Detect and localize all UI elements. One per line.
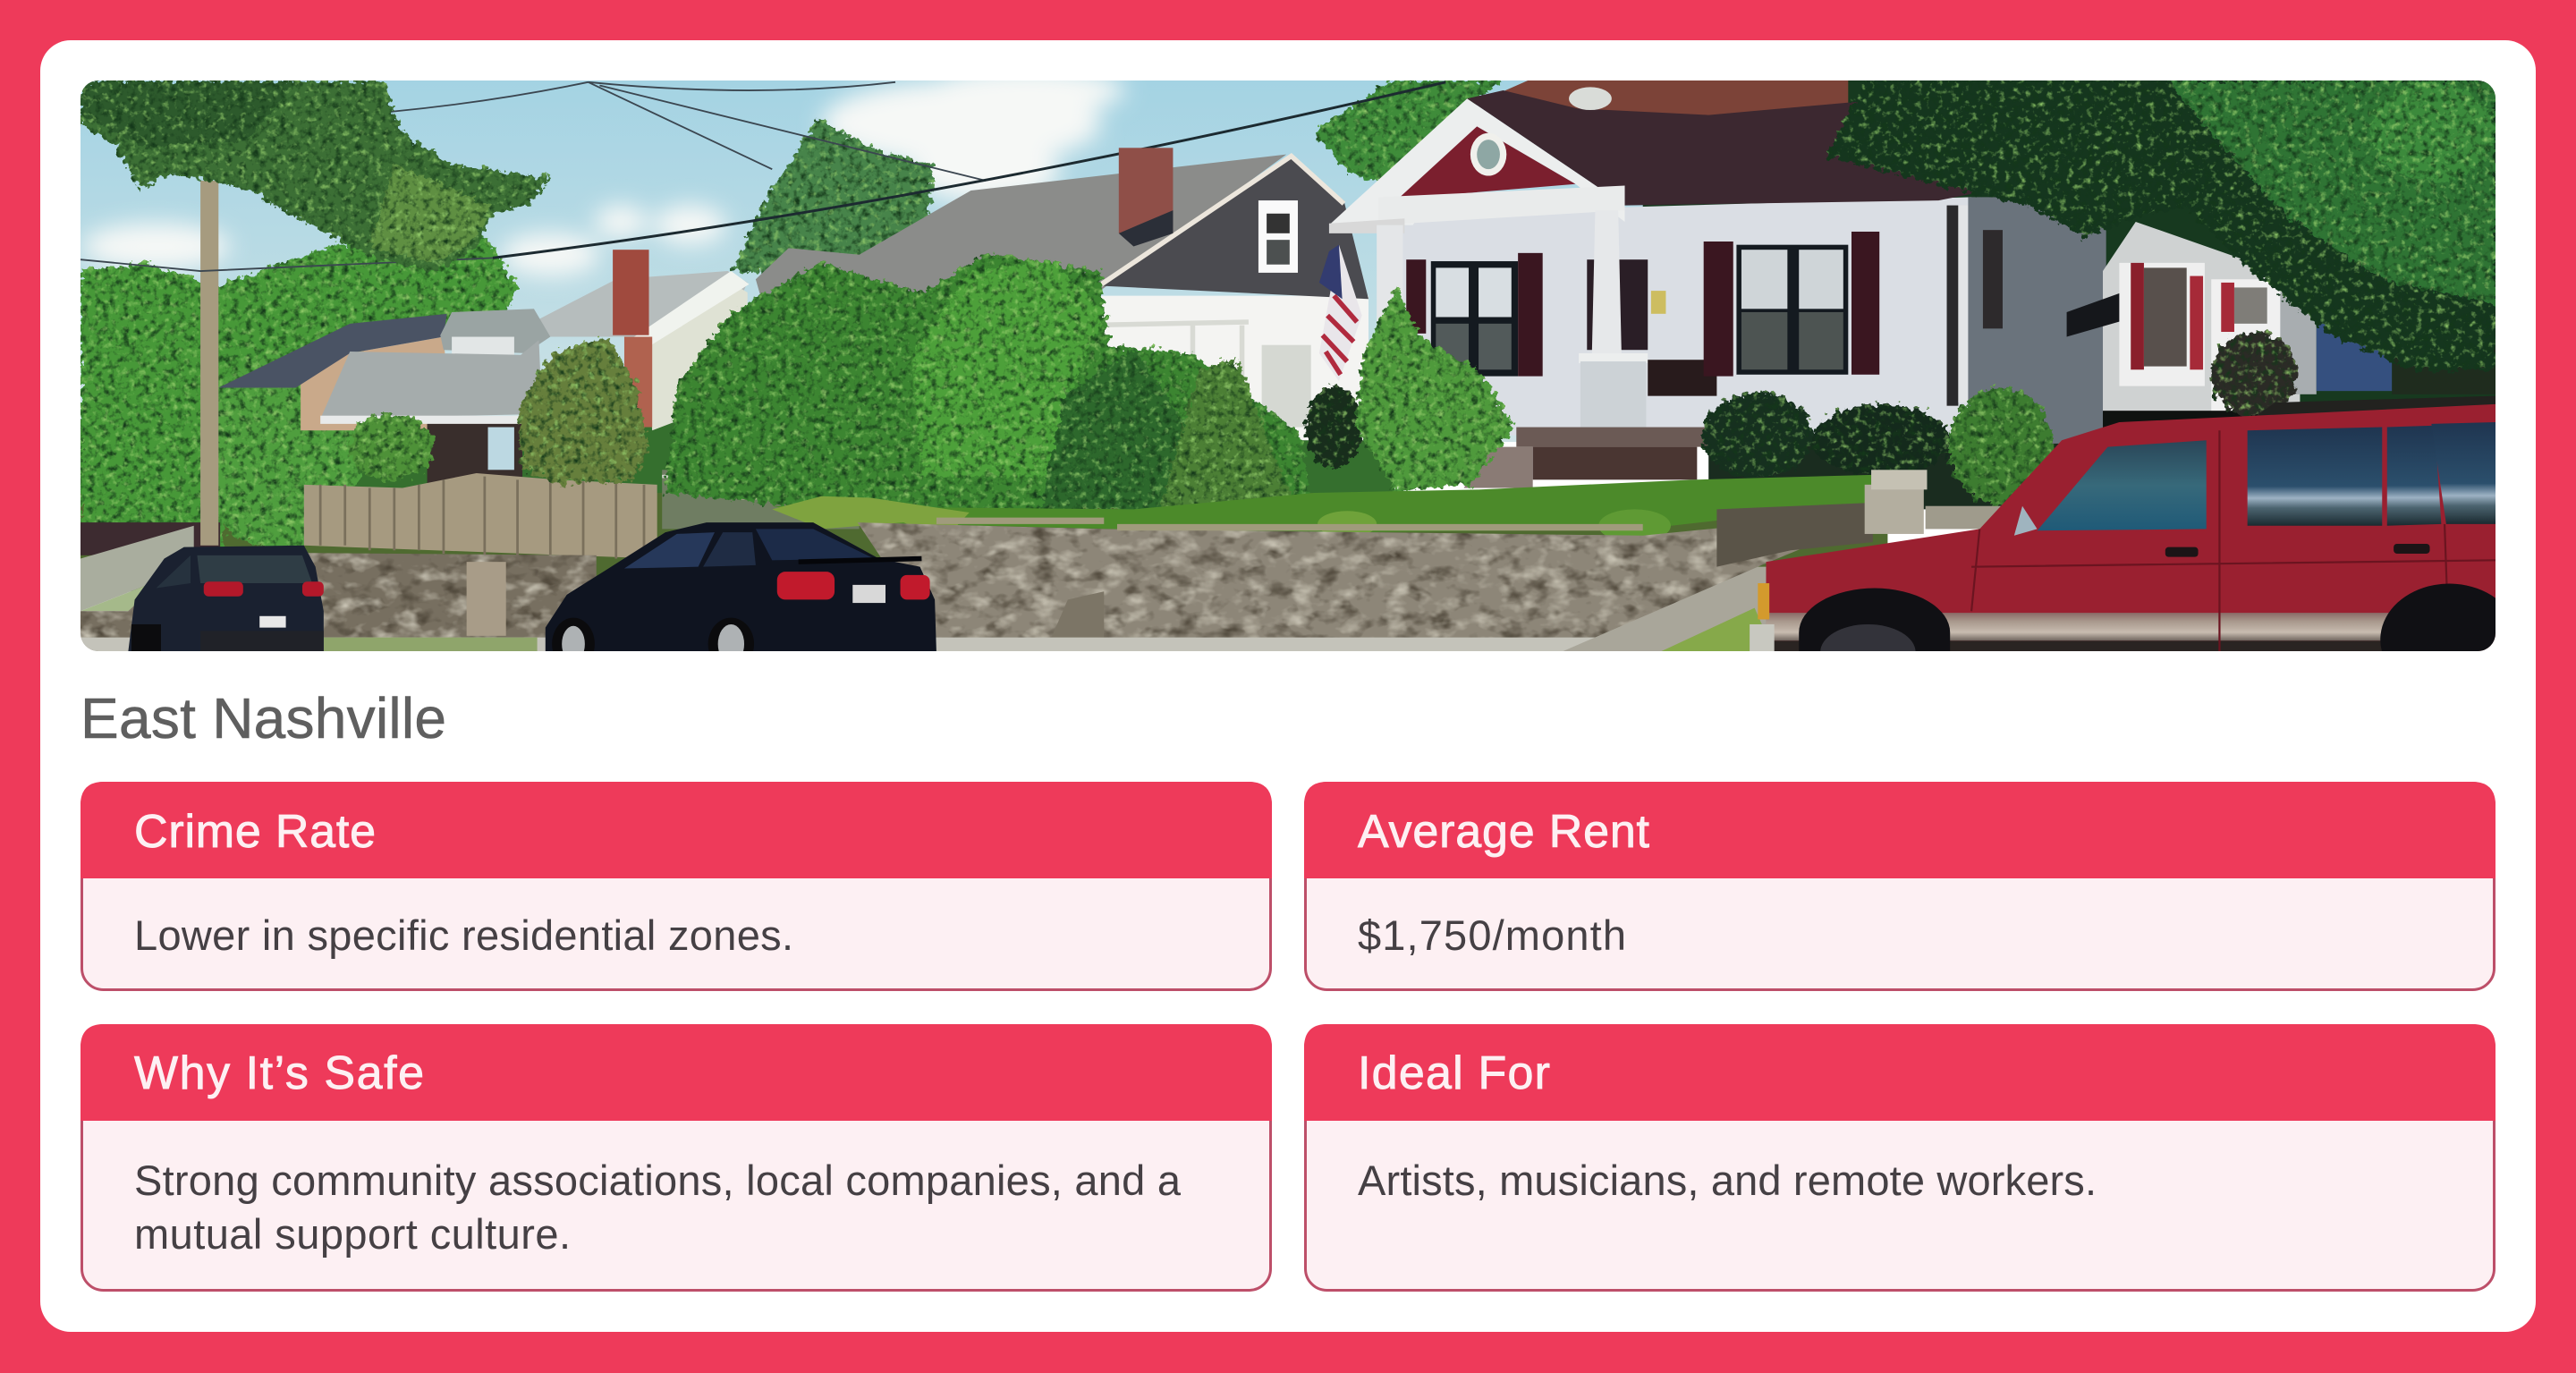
card title: Crime Rate: [134, 806, 376, 858]
card title: Average Rent: [1358, 806, 1650, 858]
left houses: [218, 250, 750, 485]
card text: mutual support culture.: [134, 1210, 571, 1258]
background trees: [80, 81, 1504, 550]
overhanging branch, upper left: [80, 81, 550, 271]
large shade tree, upper right: [1826, 81, 2496, 369]
backing shade and ground tones behind the houses: [80, 81, 2496, 591]
shrubs along the front of the houses: [1306, 332, 2297, 506]
black sedan: [546, 522, 936, 670]
card: Why It's Safe: [80, 1024, 1272, 1290]
card: Average Rent: [1304, 782, 2496, 989]
middle house with grey shingle roof: [756, 148, 1368, 440]
card title: Why It’s Safe: [134, 1047, 424, 1099]
lawn: [772, 475, 1873, 542]
dark SUV, left: [128, 546, 324, 652]
utility pole and wires: [80, 82, 1445, 546]
concrete post and edging: [1864, 470, 2001, 534]
card text: Strong community associations, local companies, and a: [134, 1157, 1182, 1204]
sky with clouds: [80, 67, 1724, 442]
red SUV: [1750, 396, 2496, 652]
heading: East Nashville: East Nashville: [80, 686, 446, 750]
card title: Ideal For: [1358, 1047, 1550, 1099]
wooden picket fence and chain-link: [80, 467, 860, 611]
card text: [134, 1157, 1182, 1258]
card text: $1,750/month: [1358, 911, 1626, 959]
card text: Artists, musicians, and remote workers.: [1358, 1157, 2097, 1204]
sidewalk, road and verges: [80, 567, 1766, 651]
card: Crime Rate: [80, 782, 1272, 989]
card: Ideal For: [1304, 1024, 2496, 1290]
right neighbouring houses: [2067, 222, 2496, 434]
photo: East Nashville street with houses and cars: [80, 67, 2496, 670]
card text: Lower in specific residential zones.: [134, 911, 793, 959]
stone retaining walls: [80, 503, 1873, 652]
front trees and bushes: [348, 255, 1514, 513]
american flag: [1319, 245, 1362, 381]
porch house: [1329, 81, 2106, 488]
